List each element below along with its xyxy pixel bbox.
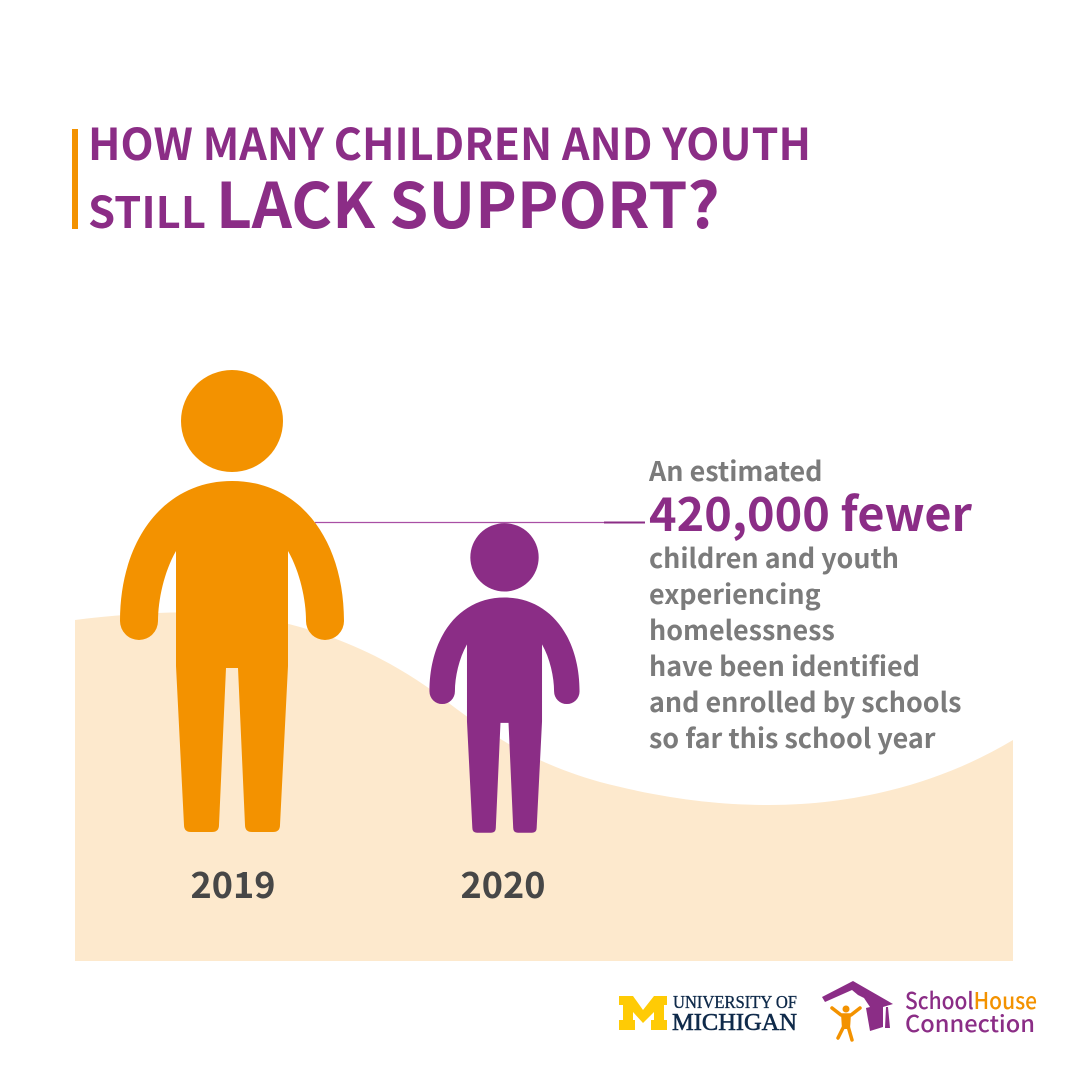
callout body: children and youth — [649, 537, 899, 576]
icon: house roof with graduation cap — [822, 981, 893, 1031]
university wordmark: UNIVERSITY OF — [673, 992, 797, 1012]
label: 2019: 2019 — [191, 857, 275, 909]
title — [72, 109, 811, 247]
callout body: experiencing — [649, 573, 821, 612]
icon: block M — [619, 996, 667, 1030]
title line 2: STILL LACK SUPPORT? — [88, 156, 720, 247]
logo: SchoolHouse Connection: Connection — [905, 1005, 1035, 1039]
icon: cap tassel — [885, 1007, 890, 1028]
logo: University of Michigan — [619, 992, 797, 1036]
schoolhouse wordmark: SchoolHouse — [905, 982, 1037, 1016]
callout body: homelessness — [649, 609, 835, 648]
callout body: so far this school year — [649, 717, 936, 756]
callout text — [648, 450, 973, 756]
callout body: have been identified — [649, 645, 920, 684]
figure: 2020 purple person — [429, 523, 580, 833]
callout intro: An estimated — [648, 450, 822, 489]
background hill shape — [75, 612, 1013, 961]
figure: 2019 orange person — [120, 370, 344, 832]
title line 1: HOW MANY CHILDREN AND YOUTH — [88, 109, 811, 173]
connector line — [315, 522, 645, 524]
callout figure: 420,000 fewer — [649, 478, 973, 545]
icon: child with raised arms — [832, 1006, 860, 1040]
logo: SchoolHouse Connection — [822, 981, 1037, 1040]
callout body — [649, 537, 961, 756]
title accent bar — [72, 129, 78, 229]
logo: University of Michigan: MICHIGAN — [672, 1009, 797, 1036]
callout body: and enrolled by schools — [649, 681, 961, 720]
label: 2020: 2020 — [461, 857, 545, 909]
